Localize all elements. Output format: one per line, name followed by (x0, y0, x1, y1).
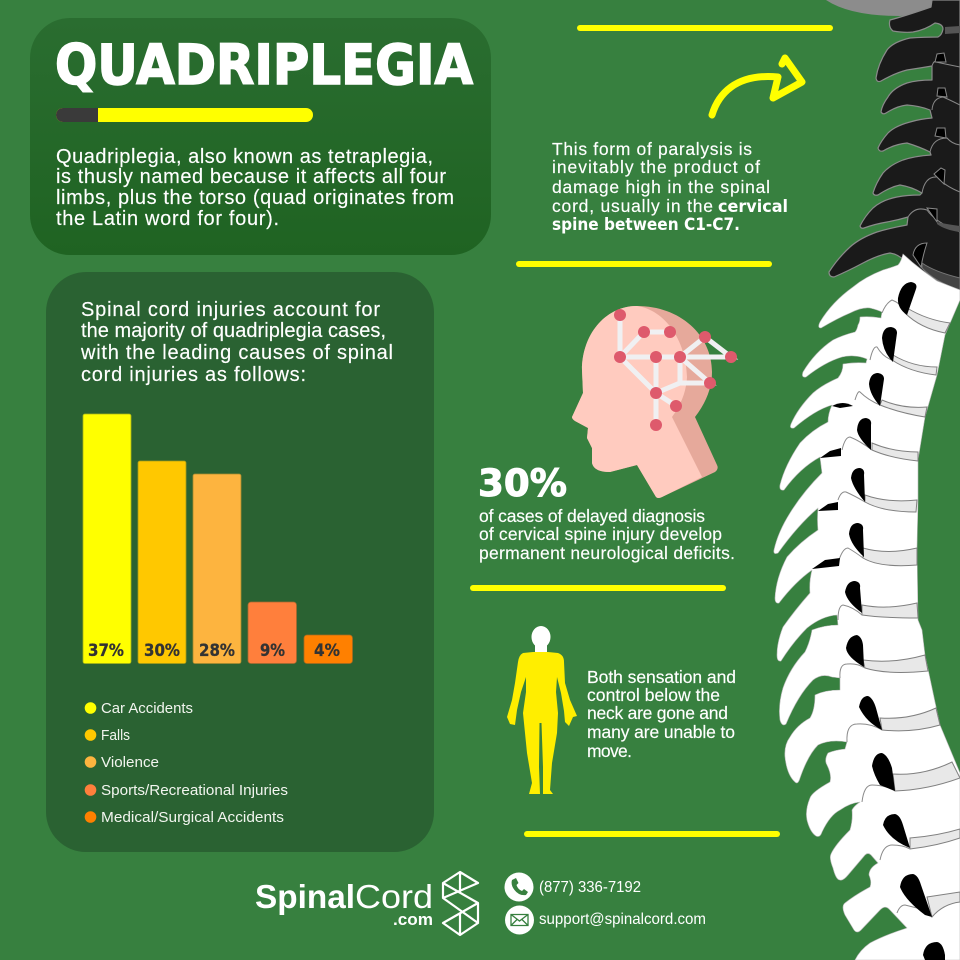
contact: phone (504, 872, 641, 902)
stat: 30 percent: 30% (478, 462, 567, 505)
text: sensation and control: control below the (587, 685, 720, 705)
text: cervical damage: inevitably the product of (552, 157, 760, 177)
text: sensation and control: move. (587, 741, 632, 761)
legend: Falls (101, 728, 130, 744)
bar: medical 4% (304, 635, 352, 664)
cervical vertebrae (dark) (829, 0, 960, 295)
legend: Car Accidents (101, 701, 193, 717)
bar: falls 30% (138, 461, 186, 664)
text: cervical damage: cervical (718, 197, 788, 216)
spinal foramina (812, 282, 945, 960)
thoracic vertebrae (white) (774, 254, 960, 960)
definition text: the Latin word for four). (56, 208, 279, 230)
logo: SpinalCord.com: Spinal (255, 879, 355, 916)
logo: SpinalCord.com (255, 872, 478, 935)
text: sensation and control: neck are gone and (587, 703, 728, 723)
icon: logo mark (443, 872, 478, 935)
text: sensation and control: many are unable to (587, 722, 735, 742)
contact: phone: (877) 336-7192 (539, 879, 641, 896)
causes intro text: Spinal cord injuries account for (81, 299, 380, 321)
text: cervical damage (552, 139, 788, 234)
panel: causes (46, 272, 434, 852)
definition text: is thusly named because it affects all four (56, 166, 446, 188)
logo: SpinalCord.com: .com (393, 910, 433, 929)
bar: violence 28%: 28% (199, 641, 235, 661)
text: cervical damage: spine between C1-C7. (552, 215, 740, 234)
title progress bar (56, 108, 313, 122)
legend: Violence (101, 755, 159, 771)
text: sensation and control (587, 667, 736, 761)
bar: medical 4%: 4% (314, 641, 340, 661)
bar: car accidents 37% (83, 414, 131, 664)
stat: 30 percent: of cases of delayed diagnosis (479, 506, 705, 526)
bar: car accidents 37%: 37% (88, 641, 124, 661)
contact: email: support@spinalcord.com (539, 911, 706, 928)
illustration: spine (774, 0, 960, 960)
definition text (56, 146, 454, 230)
stat: 30 percent: of cervical spine injury develop (479, 524, 722, 544)
legend: Sports/Recreational Injuries (101, 783, 288, 799)
legend (85, 701, 288, 826)
skull base (826, 0, 932, 16)
causes intro text: with the leading causes of spinal (80, 342, 393, 364)
causes intro text: the majority of quadriplegia cases, (81, 320, 386, 342)
text: cervical damage: This form of paralysis is (552, 139, 752, 159)
logo: SpinalCord.com: Cord (355, 879, 433, 916)
text: sensation and control: Both sensation and (587, 667, 736, 687)
arrow (712, 58, 802, 115)
intervertebral discs (905, 308, 950, 333)
bar: falls 30%: 30% (144, 641, 180, 661)
definition text: limbs, plus the torso (quad originates from (56, 187, 454, 209)
bar chart (83, 414, 352, 664)
stat: 30 percent (478, 462, 735, 563)
definition text: Quadriplegia, also known as tetraplegia, (56, 146, 433, 168)
icon: head with neural network (572, 306, 737, 498)
bar: sports 9% (248, 602, 296, 664)
facet joint outlines (882, 300, 907, 313)
legend: Medical/Surgical Accidents (101, 810, 284, 826)
contact: email (505, 906, 706, 934)
icon: human figure (507, 626, 577, 794)
bar: violence 28% (193, 474, 241, 664)
text: cervical damage: damage high in the spinal (552, 177, 770, 197)
stat: 30 percent: permanent neurological deficits. (479, 543, 735, 563)
title: QUADRIPLEGIA (55, 33, 473, 97)
causes intro text (80, 299, 393, 386)
panel: definition (30, 18, 491, 255)
bar: sports 9%: 9% (260, 641, 285, 661)
text: cervical damage: cord, usually in the (552, 196, 713, 216)
causes intro text: cord injuries as follows: (81, 364, 306, 386)
